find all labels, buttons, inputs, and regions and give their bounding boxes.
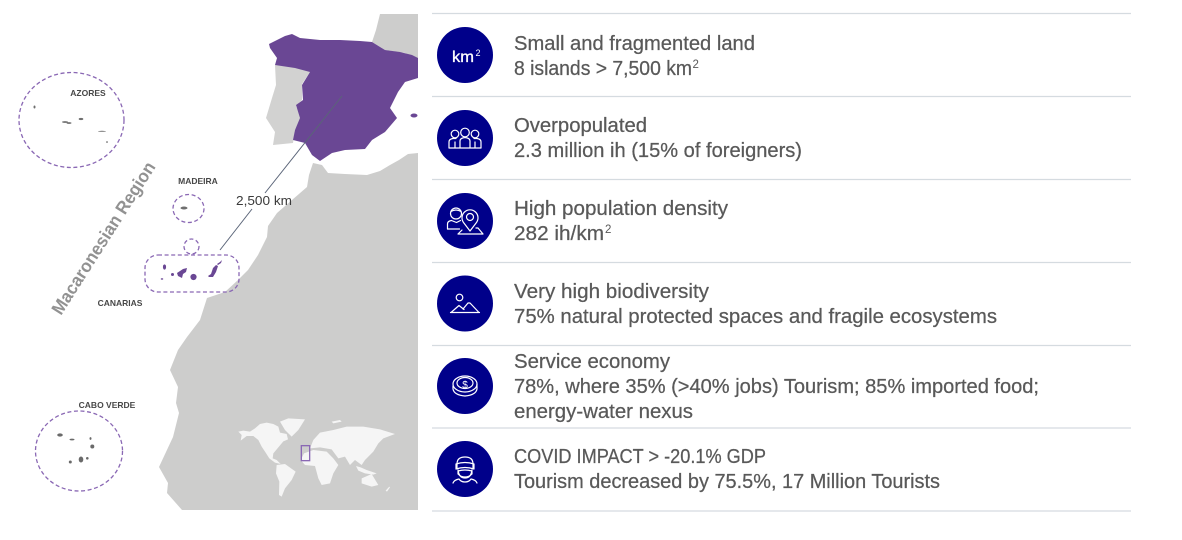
text: covid: COVID IMPACT > -20.1% GDP bbox=[514, 446, 766, 468]
locator box bbox=[301, 446, 310, 461]
land: Portugal bbox=[266, 65, 310, 145]
row: economy bbox=[437, 351, 1039, 423]
icon: people bbox=[437, 110, 493, 166]
text: biodiversity: Very high biodiversity bbox=[514, 281, 709, 303]
text: land: Small and fragmented land bbox=[514, 33, 755, 55]
Madeira group bbox=[173, 176, 218, 222]
icon: km2 bbox=[437, 27, 493, 83]
divider lines bbox=[432, 14, 1131, 511]
text: land: 8 islands > 7,500 km bbox=[514, 58, 692, 80]
icon: coin bbox=[437, 358, 493, 414]
Cabo Verde group bbox=[36, 400, 136, 491]
text: biodiversity bbox=[514, 281, 997, 328]
text: economy: Service economy bbox=[514, 351, 670, 373]
row: population bbox=[437, 110, 802, 166]
land: Africa bbox=[159, 153, 418, 510]
Cabo Verde group: CABO VERDE bbox=[79, 400, 136, 410]
Canarias group: CANARIAS bbox=[98, 298, 143, 308]
map panel bbox=[19, 14, 418, 510]
text: land: 2 bbox=[692, 59, 699, 71]
icon: person with mask bbox=[437, 441, 493, 497]
Madeira group: MADEIRA bbox=[178, 176, 218, 186]
icon: coin: $ bbox=[462, 380, 468, 391]
icon: person and pin bbox=[437, 193, 493, 249]
text: density bbox=[514, 198, 728, 245]
text: economy: 78%, where 35% (>40% jobs) Tourism; 85% imported food; bbox=[514, 376, 1039, 398]
distance label: 2,500 km bbox=[236, 194, 292, 208]
Azores group bbox=[19, 72, 124, 168]
row: covid bbox=[437, 441, 940, 497]
text: density: 2 bbox=[605, 224, 611, 236]
text: biodiversity: 75% natural protected spaces and fragile ecosystems bbox=[514, 306, 997, 328]
region title: Macaronesian Region bbox=[48, 158, 159, 318]
text: density: High population density bbox=[514, 198, 728, 220]
icon: km2: 2 bbox=[476, 48, 481, 58]
Azores group: AZORES bbox=[70, 88, 106, 98]
Salvajes circle bbox=[184, 239, 199, 254]
text: population: 2.3 million ih (15% of foreigners) bbox=[514, 140, 802, 162]
Spain highlighted bbox=[269, 34, 418, 161]
row: land bbox=[437, 27, 755, 83]
text: economy bbox=[514, 351, 1039, 423]
world locator map bbox=[238, 418, 395, 497]
text: density: 282 ih/km bbox=[514, 223, 604, 245]
text: covid: Tourism decreased by 75.5%, 17 Million Tourists bbox=[514, 471, 940, 493]
text: population: Overpopulated bbox=[514, 115, 647, 137]
row: density bbox=[437, 193, 728, 249]
row: biodiversity bbox=[437, 276, 997, 332]
text: population bbox=[514, 115, 802, 162]
icon: hills and sun bbox=[437, 276, 493, 332]
Balearic islands bbox=[410, 114, 418, 118]
text: land bbox=[514, 33, 755, 80]
icon: km2: km bbox=[452, 49, 474, 66]
Canarias group bbox=[98, 255, 239, 308]
distance line bbox=[220, 96, 342, 250]
land: France bbox=[372, 14, 418, 60]
text: economy: energy-water nexus bbox=[514, 401, 693, 423]
text: covid bbox=[514, 446, 940, 493]
